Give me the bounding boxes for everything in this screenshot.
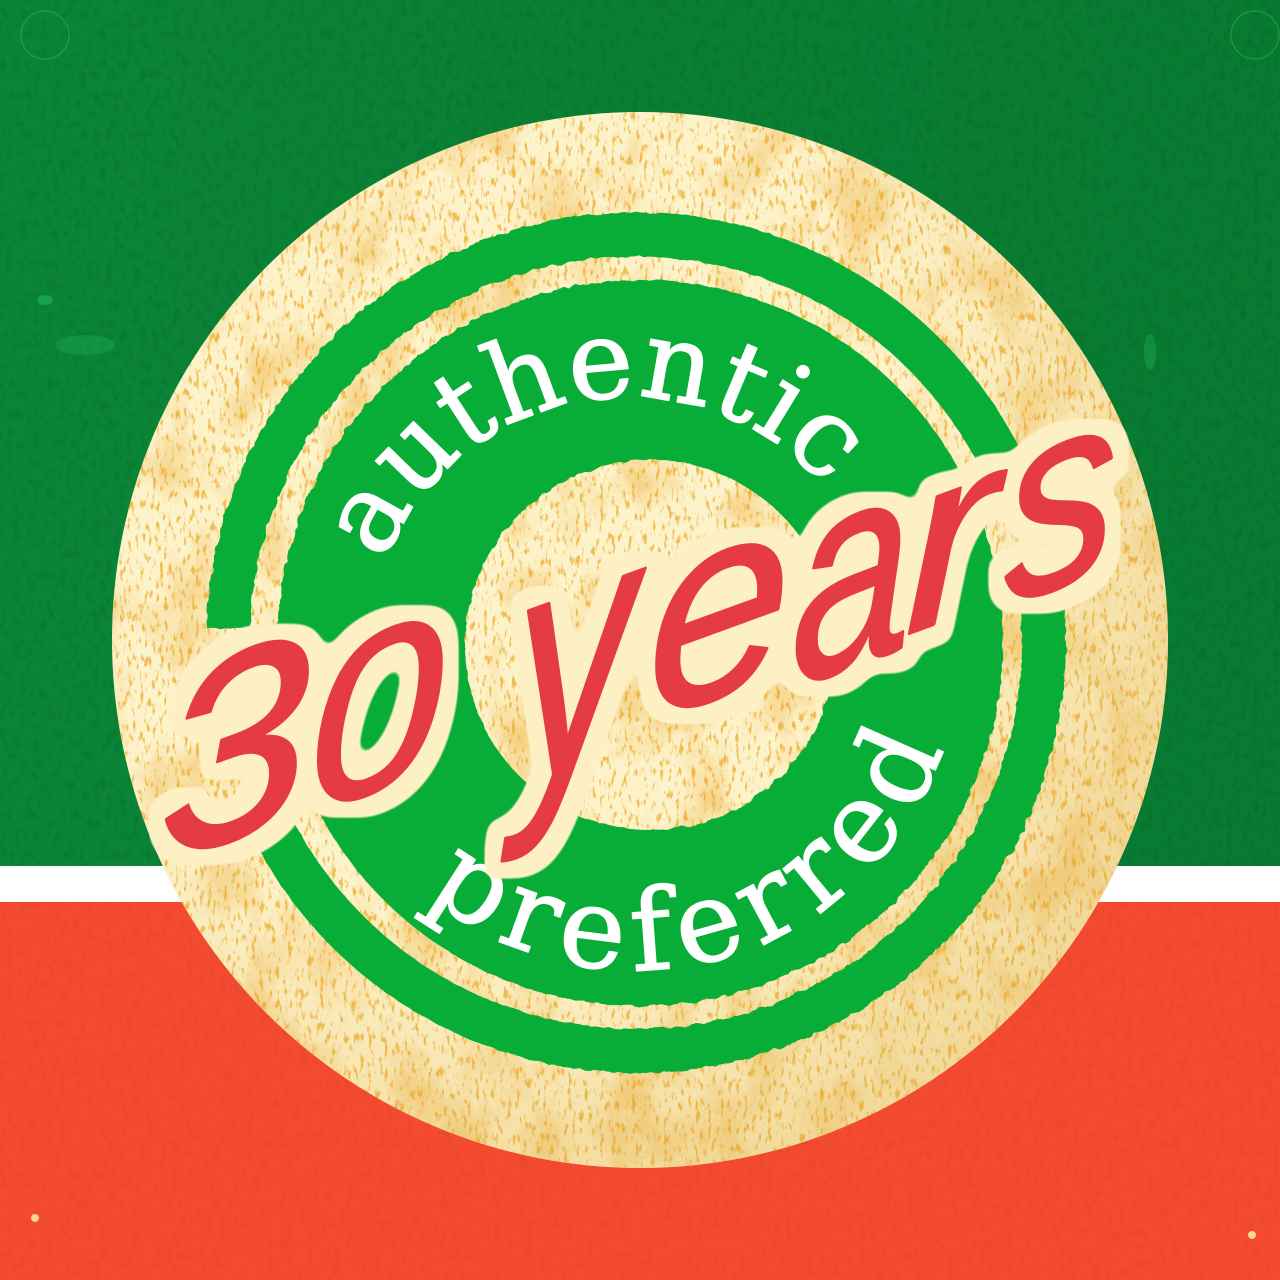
headline: 30 years: s <box>1005 326 1116 663</box>
inner green annulus <box>277 280 1003 1006</box>
text: preferred: preferred <box>414 726 944 972</box>
text: authentic: authentic <box>338 338 858 552</box>
headline: 30 years: e <box>648 430 791 779</box>
corner specks <box>31 1214 1256 1239</box>
headline: 30 years: y <box>500 444 649 868</box>
outer ring lower arc <box>275 600 1044 1051</box>
panel: cream paper disc <box>112 112 1168 1168</box>
panel: green upper background <box>0 0 1280 866</box>
headline: 30 years: r <box>905 380 1008 686</box>
headline: 30 years <box>160 326 1116 922</box>
headline: 30 years: a <box>792 391 910 747</box>
panel: red lower background <box>0 902 1280 1280</box>
outer ring upper arc <box>228 234 1010 628</box>
headline: 30 years: 0 <box>308 563 443 863</box>
stamp rings <box>228 234 1044 1051</box>
white divider band <box>0 866 1280 902</box>
headline: 30 years: 3 <box>160 572 311 922</box>
corner ring marks <box>21 11 1279 59</box>
worn scuff marks <box>37 295 1156 370</box>
